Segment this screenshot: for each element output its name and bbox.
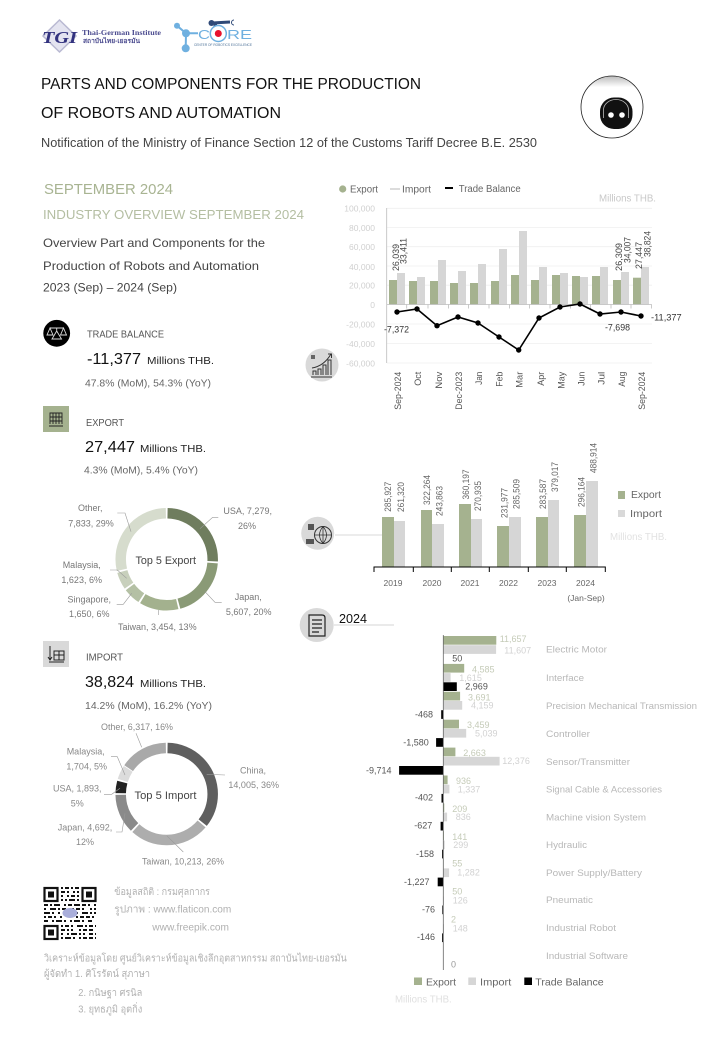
- bar chart: yearly export and import: 2024: [576, 578, 595, 588]
- panel: import: IMPORT: [86, 653, 123, 664]
- panel: import: 14.2% (MoM), 16.2% (YoY): [85, 700, 212, 712]
- bar chart: 2024 by component: 2,663: [463, 748, 486, 758]
- bar chart: 2024 by component: 4,585: [472, 664, 495, 674]
- section heading: 2024: 2024: [339, 612, 367, 626]
- bar chart: 2024 by component: 3,459: [467, 720, 490, 730]
- donut chart: top 5 import: 1,704, 5%: [66, 762, 107, 772]
- bar chart: yearly export and import: [374, 443, 605, 603]
- panel: import: [85, 653, 212, 712]
- bar chart: yearly export and import: 243,863: [434, 486, 444, 516]
- chart legend: monthly trade: [339, 184, 521, 196]
- bar chart: 2024 by component: 0: [451, 960, 456, 970]
- donut chart: top 5 export: USA, 7,279,: [223, 506, 272, 516]
- logo: CORE center of robotics excellence: [174, 20, 253, 52]
- logo: Thai-German Institute: [42, 20, 162, 52]
- text block: overview description: 2023 (Sep) – 2024 (Sep): [43, 280, 177, 294]
- bar chart: 2024 by component: -402: [415, 792, 433, 802]
- bar chart: 2024 by component: Power Supply/Battery: [546, 868, 642, 879]
- text block: analysis credits: ผู้จัดทำ 1. ศิโรรัตน์ สุภาษา: [44, 967, 150, 980]
- combo chart: monthly export, import and trade balance: Jan: [474, 372, 485, 385]
- bar chart: 2024 by component: 50: [452, 654, 462, 664]
- bar chart: 2024 by component: 126: [453, 896, 468, 906]
- bar chart: 2024 by component: Electric Motor: [546, 644, 607, 656]
- donut chart: top 5 import: Taiwan, 10,213, 26%: [142, 856, 224, 866]
- bar chart: 2024 by component: 4,159: [471, 700, 494, 710]
- bar chart: 2024 by component: -1,580: [403, 738, 429, 748]
- bar chart: 2024 by component: 299: [453, 840, 468, 850]
- bar chart: yearly export and import: 285,927: [383, 482, 393, 512]
- text block: analysis credits: [44, 952, 347, 1016]
- bar chart: 2024 by component: -9,714: [366, 766, 392, 776]
- donut chart: top 5 export: Taiwan, 3,454, 13%: [118, 622, 197, 632]
- combo chart: monthly export, import and trade balance: 80,000: [349, 223, 375, 233]
- logo: Thai-German Institute: Thai-German Institute: [82, 28, 162, 37]
- donut chart: top 5 import: China,: [240, 766, 266, 776]
- panel: export: [84, 418, 206, 476]
- combo chart: monthly export, import and trade balance: Feb: [494, 372, 506, 387]
- donut chart: top 5 import: 12%: [76, 837, 94, 847]
- combo chart: monthly export, import and trade balance: -7,372: [384, 324, 409, 336]
- bar chart: yearly export and import: 360,197: [461, 470, 471, 500]
- icon: document notes: [300, 608, 334, 642]
- combo chart: monthly export, import and trade balance: -60,000: [346, 358, 375, 368]
- bar chart: 2024 by component: 1,615: [459, 673, 482, 683]
- chart legend: 2024 by component: [414, 977, 604, 989]
- icon: robot head: [581, 76, 643, 138]
- combo chart: monthly export, import and trade balance: 26,039: [391, 244, 402, 271]
- donut chart: top 5 export: 26%: [238, 521, 256, 531]
- bar chart: 2024 by component: 1,337: [458, 784, 480, 794]
- bar chart: yearly export and import: 283,587: [538, 479, 548, 509]
- bar chart: yearly export and import: 2019: [384, 578, 403, 588]
- combo chart: monthly export, import and trade balance: Jun: [576, 372, 588, 386]
- donut chart: top 5 export: Malaysia,: [63, 560, 101, 570]
- logo: Thai-German Institute: สถาบันไทย-เยอรมัน: [83, 36, 141, 45]
- combo chart: monthly export, import and trade balance: -7,698: [605, 322, 630, 334]
- bar chart: 2024 by component: -468: [415, 710, 433, 720]
- icon: export factory: [43, 406, 69, 432]
- logo: Thai-German Institute: TGI: [42, 28, 79, 47]
- combo chart: monthly export, import and trade balance: -20,000: [346, 320, 375, 330]
- bar chart: 2024 by component: 2: [451, 914, 456, 924]
- icon: QR code: [44, 888, 96, 939]
- combo chart: monthly export, import and trade balance: Sep-2024: [637, 372, 648, 410]
- donut chart: top 5 import: [53, 722, 279, 866]
- icon: import boxes: [43, 641, 69, 667]
- combo chart: monthly export, import and trade balance: 33,411: [398, 238, 410, 264]
- combo chart: monthly export, import and trade balance: Oct: [413, 371, 424, 386]
- bar chart: 2024 by component: Signal Cable & Accessories: [546, 784, 662, 796]
- text block: overview description: [43, 236, 265, 294]
- bar chart: 2024 by component: Hydraulic: [546, 840, 587, 851]
- connector line: [335, 534, 382, 536]
- bar chart: yearly export and import: 2020: [423, 578, 442, 588]
- bar chart: 2024 by component: 50: [452, 886, 462, 896]
- bar chart: 2024 by component: 936: [456, 776, 471, 786]
- combo chart: monthly export, import and trade balance: Aug: [617, 372, 628, 387]
- combo chart: monthly export, import and trade balance: [344, 204, 682, 410]
- donut chart: top 5 export: 1,650, 6%: [69, 609, 110, 619]
- chart legend: 2024 by component: Import: [480, 977, 511, 989]
- bar chart: yearly export and import: 379,017: [550, 462, 560, 492]
- bar chart: 2024 by component: 11,657: [500, 634, 527, 644]
- text block: data sources: [114, 886, 231, 934]
- bar chart: yearly export and import: 270,935: [473, 481, 483, 511]
- subtitle: Notification of the Ministry of Finance Section 12 of the Customs Tariff Decree B.E. 2530: [41, 136, 537, 150]
- bar chart: 2024 by component: Controller: [546, 729, 590, 740]
- combo chart: monthly export, import and trade balance: Dec-2023: [454, 372, 465, 410]
- donut chart: top 5 import: USA, 1,893,: [53, 784, 102, 794]
- heading: industry overview: INDUSTRY OVERVIEW SEPTEMBER 2024: [43, 207, 304, 222]
- text block: analysis credits: วิเคราะห์ข้อมูลโดย ศูนย์วิเคราะห์ข้อมูลเชิงลึกอุตสาหกรรม สถาบันไทย-เยอรมัน: [44, 952, 347, 965]
- bar chart: 2024 by component: 11,607: [504, 646, 531, 656]
- combo chart: monthly export, import and trade balance: Nov: [434, 371, 445, 389]
- combo chart: monthly export, import and trade balance: 0: [370, 300, 375, 310]
- text block: overview description: Overview Part and Components for the: [43, 236, 265, 250]
- bar chart: 2024 by component: -627: [414, 820, 432, 830]
- bar chart: 2024 by component: [366, 634, 697, 970]
- donut chart: top 5 export: 5,607, 20%: [226, 607, 271, 617]
- donut chart: top 5 export: Japan,: [235, 592, 262, 602]
- panel: import: 38,824: [85, 674, 134, 691]
- combo chart: monthly export, import and trade balance: 60,000: [349, 242, 375, 252]
- text block: analysis credits: 3. ยุทธภูมิ อุตกิ่ง: [78, 1002, 142, 1016]
- donut chart: top 5 export: Singapore,: [68, 594, 111, 604]
- panel: import: Millions THB.: [140, 678, 206, 690]
- bar chart: 2024 by component: -146: [417, 932, 435, 942]
- panel: trade balance: 47.8% (MoM), 54.3% (YoY): [85, 378, 211, 390]
- donut chart: top 5 import: 14,005, 36%: [228, 780, 279, 790]
- bar chart: 2024 by component: Industrial Software: [546, 951, 628, 962]
- bar chart: yearly export and import: 322,264: [422, 475, 432, 505]
- donut chart: top 5 export: 1,623, 6%: [61, 575, 102, 585]
- title: OF ROBOTS AND AUTOMATION: [41, 105, 281, 122]
- icon: trade balance scales: [43, 320, 70, 347]
- bar chart: yearly export and import: 488,914: [588, 443, 598, 473]
- text block: analysis credits: 2. กนิษฐา ศรนิล: [78, 988, 142, 999]
- unit label: Millions THB.: [610, 532, 667, 543]
- donut chart: top 5 import: Top 5 Import: [134, 790, 196, 802]
- logo: CORE center of robotics excellence: CENTER OF ROBOTICS EXCELLENCE: [194, 43, 253, 47]
- bar chart: 2024 by component: -1,227: [404, 877, 430, 887]
- chart legend: monthly trade: Import: [402, 184, 431, 196]
- bar chart: yearly export and import: 2023: [538, 578, 557, 588]
- bar chart: yearly export and import: 296,164: [576, 477, 586, 507]
- panel: export: EXPORT: [86, 418, 124, 429]
- combo chart: monthly export, import and trade balance: -40,000: [346, 339, 375, 349]
- donut chart: top 5 import: Malaysia,: [67, 746, 105, 756]
- bar chart: 2024 by component: 2,969: [465, 682, 488, 692]
- combo chart: monthly export, import and trade balance: 27,447: [634, 242, 645, 269]
- bar chart: 2024 by component: 148: [453, 924, 468, 934]
- combo chart: monthly export, import and trade balance: 34,007: [622, 237, 634, 263]
- donut chart: top 5 import: 5%: [71, 798, 84, 808]
- bar chart: 2024 by component: -158: [416, 849, 434, 859]
- bar chart: 2024 by component: 1,282: [457, 868, 480, 878]
- chart legend: monthly trade: Trade Balance: [459, 184, 521, 195]
- bar chart: 2024 by component: 209: [452, 804, 467, 814]
- text block: data sources: www.freepik.com: [151, 923, 229, 934]
- panel: trade balance: TRADE BALANCE: [87, 330, 164, 341]
- title: PARTS AND COMPONENTS FOR THE PRODUCTION: [41, 76, 421, 93]
- donut chart: top 5 import: Japan, 4,692,: [58, 822, 112, 832]
- bar chart: 2024 by component: Machine vision System: [546, 812, 646, 824]
- logo: CORE center of robotics excellence: RE: [227, 27, 252, 42]
- panel: export: 4.3% (MoM), 5.4% (YoY): [84, 464, 198, 476]
- donut chart: top 5 export: [61, 503, 272, 632]
- bar chart: 2024 by component: 141: [452, 832, 467, 842]
- bar chart: 2024 by component: 836: [456, 812, 471, 822]
- bar chart: yearly export and import: 2021: [461, 578, 480, 588]
- bar chart: 2024 by component: Industrial Robot: [546, 923, 616, 934]
- title: [41, 76, 421, 122]
- bar chart: 2024 by component: Sensor/Transmitter: [546, 757, 630, 768]
- chart legend: yearly: Export: [631, 489, 661, 501]
- bar chart: 2024 by component: -76: [422, 904, 435, 914]
- combo chart: monthly export, import and trade balance: Apr: [536, 372, 547, 386]
- bar chart: yearly export and import: 261,320: [396, 482, 406, 512]
- combo chart: monthly export, import and trade balance: Sep-2024: [393, 372, 404, 410]
- bar chart: 2024 by component: Pneumatic: [546, 895, 593, 906]
- text block: data sources: รูปภาพ : www.flaticon.com: [114, 905, 231, 916]
- donut chart: top 5 export: Top 5 Export: [136, 555, 196, 567]
- combo chart: monthly export, import and trade balance: -11,377: [651, 312, 682, 324]
- icon: globe and truck: [301, 517, 334, 550]
- bar chart: yearly export and import: 2022: [499, 578, 518, 588]
- panel: export: 27,447: [85, 439, 135, 456]
- donut chart: top 5 export: Other,: [78, 503, 103, 513]
- combo chart: monthly export, import and trade balance: Jul: [596, 372, 608, 385]
- heading: September 2024: SEPTEMBER 2024: [44, 181, 173, 198]
- combo chart: monthly export, import and trade balance: 20,000: [349, 280, 375, 290]
- chart legend: 2024 by component: Trade Balance: [535, 977, 604, 989]
- icon: growth chart: [306, 348, 338, 382]
- combo chart: monthly export, import and trade balance: 40,000: [349, 262, 375, 272]
- panel: trade balance: -11,377: [87, 351, 141, 368]
- chart legend: monthly trade: Export: [350, 184, 378, 196]
- logo: CORE center of robotics excellence: C: [198, 27, 210, 42]
- combo chart: monthly export, import and trade balance: May: [556, 371, 568, 389]
- chart legend: 2024 by component: Export: [426, 977, 456, 989]
- panel: export: Millions THB.: [140, 443, 206, 455]
- bar chart: 2024 by component: Precision Mechanical Transmission: [546, 701, 697, 712]
- bar chart: 2024 by component: 12,376: [502, 756, 530, 766]
- bar chart: 2024 by component: 55: [452, 858, 462, 868]
- panel: trade balance: Millions THB.: [147, 355, 214, 367]
- bar chart: 2024 by component: Interface: [546, 673, 584, 684]
- bar chart: yearly export and import: 285,509: [512, 479, 522, 509]
- donut chart: top 5 import: Other, 6,317, 16%: [101, 722, 173, 732]
- bar chart: yearly export and import: 231,977: [500, 488, 510, 518]
- combo chart: monthly export, import and trade balance: 38,824: [642, 231, 654, 257]
- text block: data sources: ข้อมูลสถิติ : กรมศุลกากร: [114, 886, 211, 898]
- section heading: 2024: [334, 612, 394, 626]
- text block: overview description: Production of Robots and Automation: [43, 259, 259, 273]
- unit label: Millions THB.: [599, 194, 656, 205]
- bar chart: yearly export and import: (Jan-Sep): [567, 593, 605, 603]
- panel: trade balance: [85, 330, 214, 390]
- chart legend: yearly: [618, 489, 662, 520]
- unit label: Millions THB.: [395, 995, 452, 1006]
- chart legend: yearly: Import: [630, 508, 662, 520]
- combo chart: monthly export, import and trade balance: 100,000: [344, 204, 375, 214]
- bar chart: 2024 by component: 5,039: [475, 728, 498, 738]
- bar chart: 2024 by component: 3,691: [468, 692, 491, 702]
- combo chart: monthly export, import and trade balance: 26,309: [614, 243, 625, 271]
- donut chart: top 5 export: 7,833, 29%: [68, 518, 114, 528]
- combo chart: monthly export, import and trade balance: Mar: [514, 372, 526, 388]
